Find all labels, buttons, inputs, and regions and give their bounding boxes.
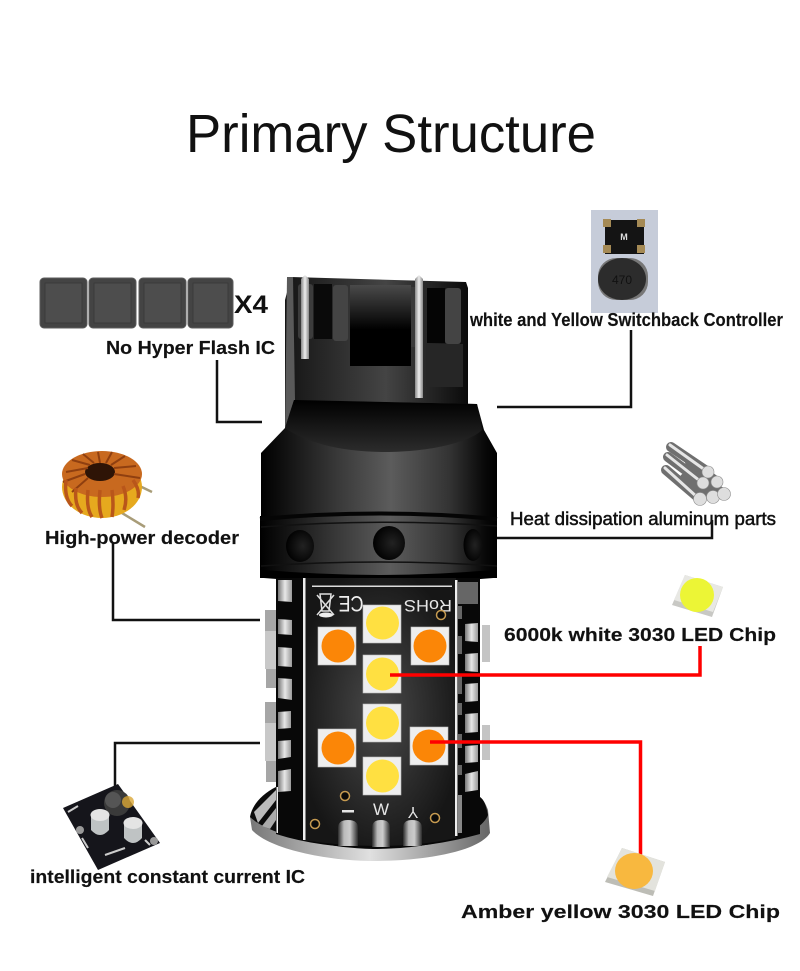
icon: aluminum rods — [665, 445, 730, 506]
icon: four hyper flash IC chips — [40, 278, 233, 328]
bulb collar and body — [261, 400, 497, 520]
bulb plug top — [285, 275, 468, 430]
label: no hyper flash IC: No Hyper Flash IC — [106, 338, 275, 358]
left side tabs — [265, 610, 276, 782]
icon: switchback controller module: 470 — [612, 273, 632, 287]
CE mark: CE — [338, 591, 364, 616]
icon: white LED chip — [672, 575, 723, 617]
LED bulb — [250, 275, 497, 861]
label: white LED chip: 6000k white 3030 LED Chip — [504, 625, 776, 645]
icon: switchback controller module — [591, 210, 658, 313]
RoHS mark: RoHS — [404, 596, 452, 615]
label: intelligent constant current IC: intelligent constant current IC — [30, 867, 305, 887]
LED chips on board — [318, 605, 449, 795]
red arrow: amber LED to amber chip — [430, 742, 640, 855]
terminal labels: W — [373, 800, 389, 819]
red arrow: white LED to white chip — [390, 646, 700, 675]
label: high-power decoder: High-power decoder — [45, 528, 239, 548]
multiplier label: X4 — [234, 291, 268, 319]
waste bin mark — [317, 594, 334, 618]
label: amber LED chip: Amber yellow 3030 LED Chip — [461, 902, 780, 922]
left side stripes — [278, 580, 292, 792]
connector: hyper flash IC to bulb — [217, 360, 262, 422]
terminal labels: Y — [407, 803, 418, 820]
solder pads — [310, 610, 446, 828]
metal contact pins — [301, 275, 423, 398]
connector: aluminum parts to bulb — [497, 520, 712, 538]
label: heat dissipation aluminum parts: Heat dissipation aluminum parts — [510, 509, 776, 529]
title: Primary Structure — [186, 104, 596, 164]
connector: constant current IC to bulb — [115, 743, 260, 787]
icon: constant current IC board — [63, 784, 160, 870]
terminal labels — [342, 800, 418, 820]
connector: decoder to bulb — [113, 543, 260, 620]
bulb vented ring — [260, 514, 497, 579]
label: switchback controller: white and Yellow Switchback Controller — [469, 310, 783, 330]
right side stripes — [458, 582, 478, 833]
LED circuit board — [265, 578, 490, 848]
icon: decoder toroid coil — [62, 451, 152, 527]
icon: amber LED chip — [605, 848, 665, 896]
right side tabs — [482, 625, 490, 760]
bottom terminal pins — [338, 820, 422, 847]
silver base — [250, 787, 490, 861]
connector: switchback controller to bulb — [497, 330, 631, 407]
icon: switchback controller module: M — [620, 232, 628, 242]
board markings — [310, 591, 452, 847]
